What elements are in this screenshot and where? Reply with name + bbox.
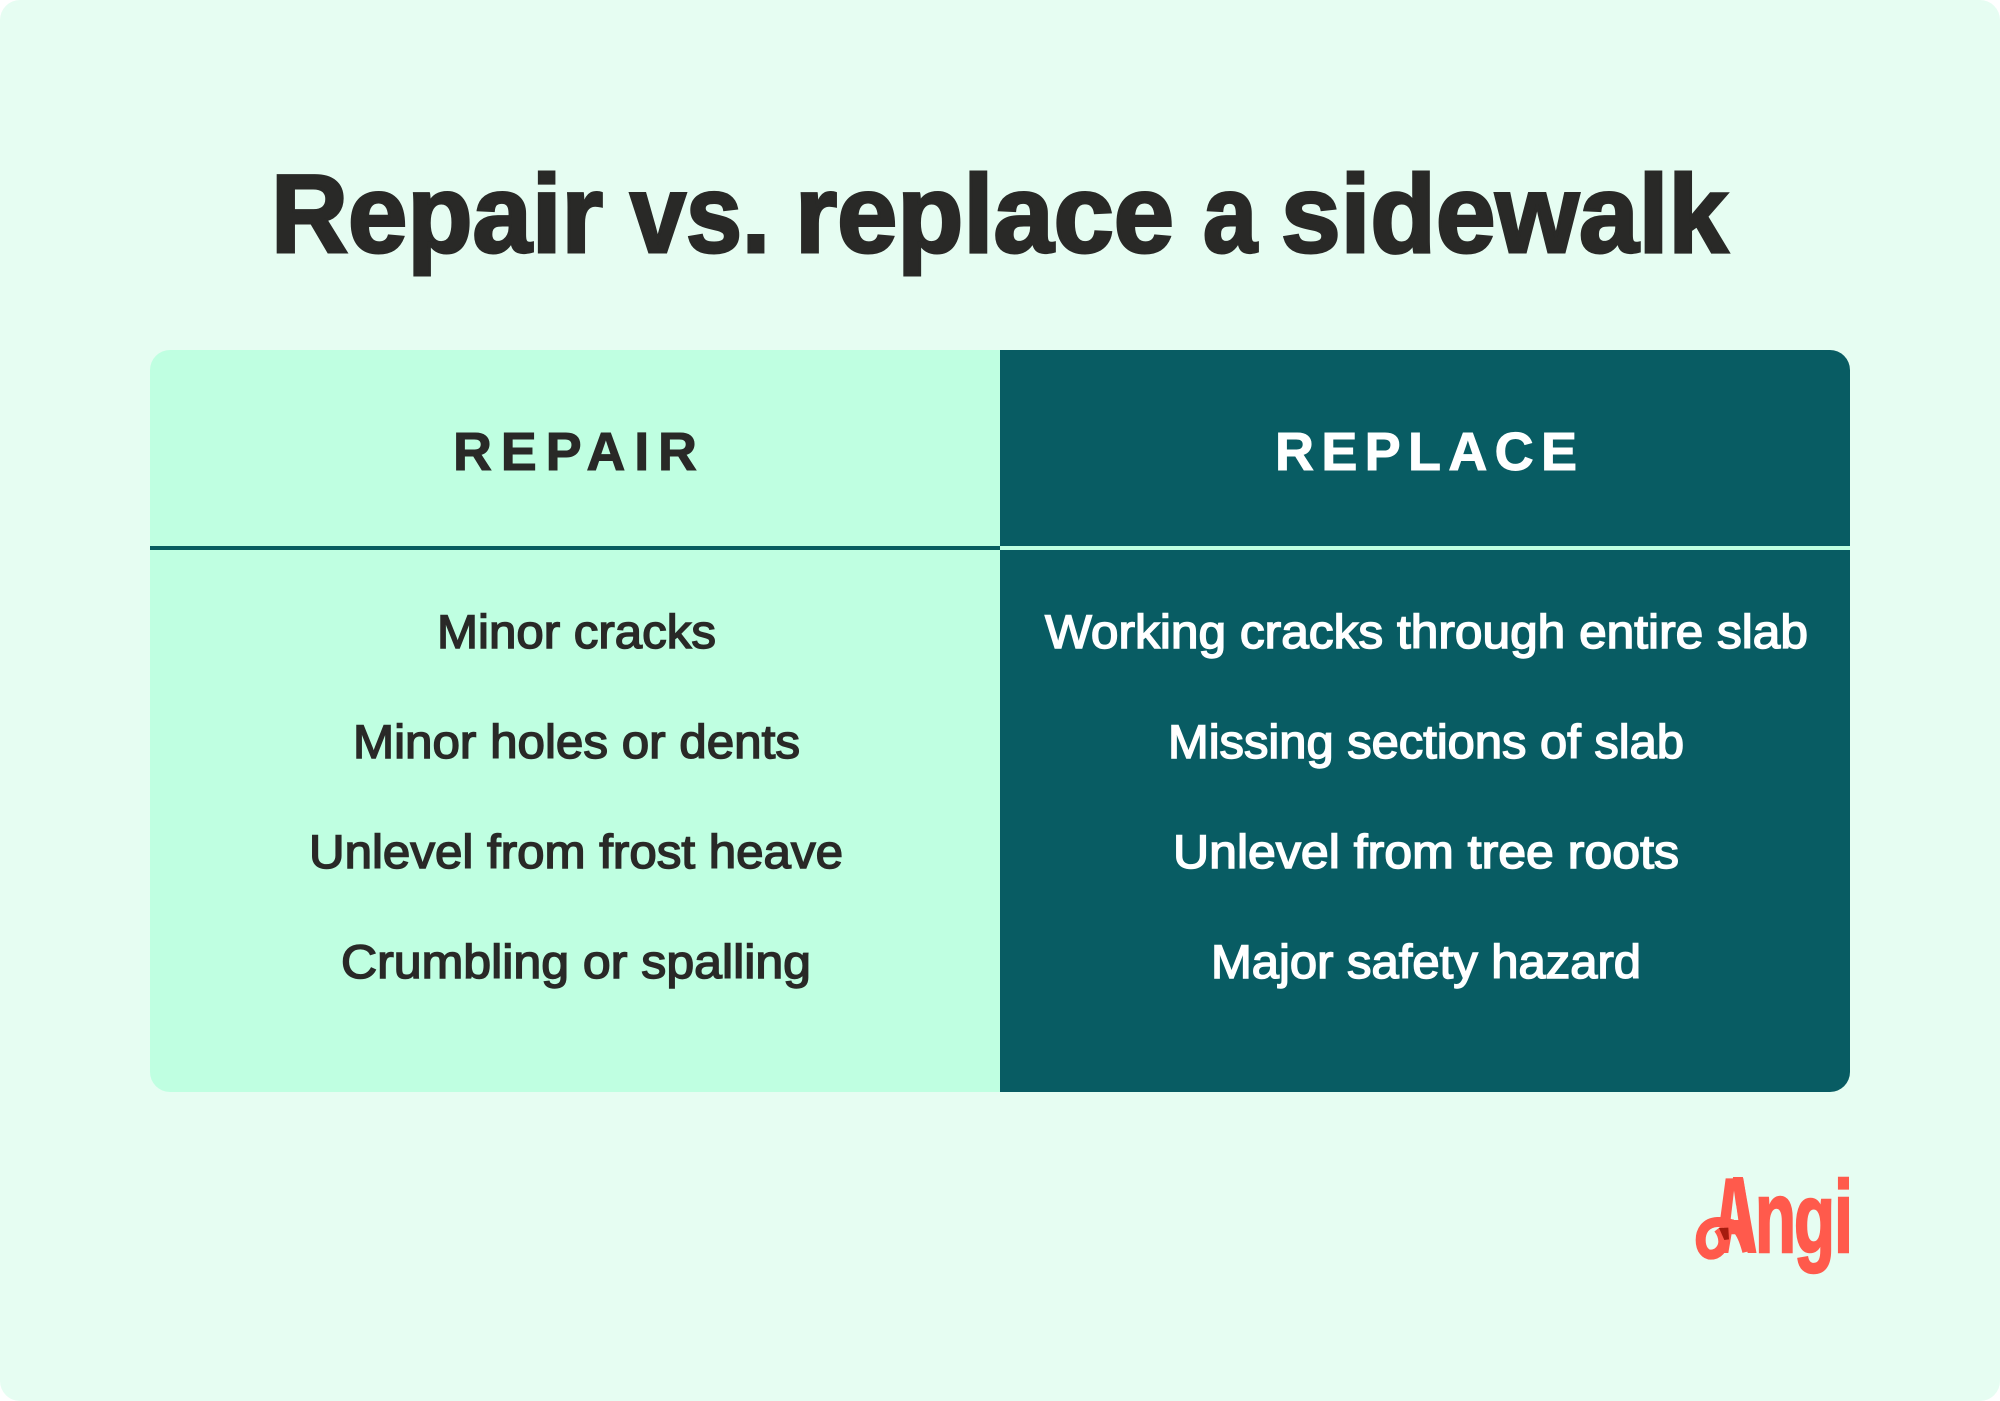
heading: replace: REPLACE [1275,422,1577,482]
panel: repair [150,350,1000,1092]
title: Repair [271,153,603,276]
list: replace conditions: Unlevel from tree roots [1173,825,1679,878]
comparison table [150,350,1850,1092]
list: repair conditions [309,605,843,988]
logo: Angi [1701,1155,1853,1275]
list: repair conditions: Crumbling or spalling [341,935,811,988]
title [271,153,1729,276]
logo: Angi: i [1834,1160,1853,1274]
title: a [1203,153,1258,276]
list: repair conditions: Minor cracks [437,605,716,658]
list: replace conditions: Working cracks through entire slab [1045,605,1808,658]
title: replace [795,153,1174,276]
list: replace conditions: Major safety hazard [1211,935,1641,988]
list: repair conditions: Unlevel from frost heave [309,825,843,878]
list: repair conditions: Minor holes or dents [353,715,800,768]
logo: Angi: n [1755,1160,1796,1274]
logo: Angi: A [1719,1155,1757,1275]
title: vs. [630,153,770,276]
title: sidewalk [1281,153,1729,276]
heading: repair: REPAIR [453,422,697,482]
list: replace conditions: Missing sections of slab [1168,715,1684,768]
panel: replace [1000,350,1850,1092]
logo: Angi: g [1794,1163,1835,1273]
list: replace conditions [1045,605,1808,988]
